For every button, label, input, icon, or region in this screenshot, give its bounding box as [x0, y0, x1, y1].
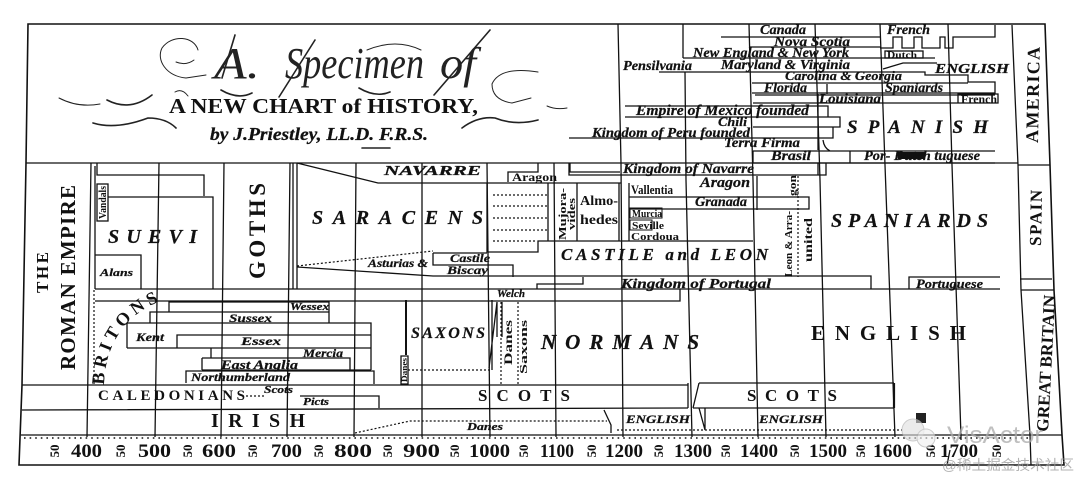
century labels: 1500 [809, 441, 847, 462]
label: SCOTS second: SCOTS [747, 386, 837, 405]
label: ENGLISH large: ENGLISH [811, 321, 966, 345]
Spain section [95, 162, 1000, 301]
label: Canada: Canada [760, 23, 806, 38]
half-century labels: 50 [989, 444, 1004, 458]
label: Alans: Alans [99, 267, 133, 279]
title script [210, 39, 482, 88]
title main line: A NEW CHART of HISTORY, [169, 94, 478, 118]
left side label: The Roman Empire [33, 185, 80, 370]
century grid lines [87, 24, 961, 437]
title script: Specimen [285, 39, 424, 88]
label: hedes: hedes [580, 213, 619, 228]
label: GREAT BRITAIN: GREAT BRITAIN [1033, 294, 1059, 432]
half-century labels: 50 [180, 444, 195, 458]
label: Murcia: Murcia [632, 208, 662, 220]
watermark [902, 419, 1074, 473]
label: Northumberland: Northumberland [190, 370, 291, 384]
half-century labels: 50 [113, 444, 128, 458]
century labels: 1000 [469, 441, 510, 462]
half-century labels: 50 [447, 444, 462, 458]
century labels: 800 [334, 441, 372, 462]
label: SARACENS: SARACENS [312, 207, 483, 229]
label: Scots small: Scots [264, 384, 293, 396]
label: Florida: Florida [763, 81, 807, 96]
half-century labels: 50 [311, 444, 326, 458]
label: Aragon small: Aragon [512, 170, 557, 184]
time scale [24, 437, 1030, 465]
Scots boxes and notch [688, 383, 705, 430]
label: Almo-: Almo- [580, 194, 618, 209]
label: Empire of Mexico founded: Empire of Mexico founded [635, 103, 810, 119]
label: Mercia: Mercia [302, 346, 343, 360]
label: Granada: Granada [695, 195, 747, 210]
label: BRITONS: BRITONS [92, 292, 156, 384]
label: Louisiana: Louisiana [818, 92, 881, 107]
label: Danes box: Danes [400, 358, 409, 382]
label: East Anglia: East Anglia [220, 357, 299, 372]
label: Nova Scotia: Nova Scotia [773, 35, 850, 50]
half-century labels: 50 [787, 444, 802, 458]
half-century labels: 50 [47, 444, 62, 458]
Saxons and Danes marks [405, 300, 407, 355]
label: Navarre: NAVARRE [382, 164, 481, 179]
label: Portuguese: Portuguese [916, 276, 983, 291]
century labels: 700 [271, 441, 302, 462]
Spain boundaries [297, 163, 826, 183]
label: GOTHS: GOTHS [245, 183, 270, 279]
Dutch lower box [898, 152, 925, 159]
label: Kingdom of Peru founded: Kingdom of Peru founded [591, 126, 751, 141]
label: Gum: gon [787, 175, 799, 196]
century labels: 1200 [605, 441, 643, 462]
label: SPAIN: SPAIN [1026, 189, 1046, 246]
Great Britain section [92, 288, 966, 434]
label: Mujora vides: Mujora- [557, 188, 569, 240]
label: Sussex: Sussex [229, 311, 272, 325]
label: Pensilvania: Pensilvania [623, 59, 692, 74]
label: Kent: Kent [135, 330, 165, 344]
label: THE: THE [33, 252, 52, 293]
label: Spaniards small: Spaniards [885, 81, 944, 96]
label: Picts: Picts [303, 396, 329, 408]
label: Cordoua: Cordoua [631, 231, 680, 243]
century labels: 1400 [740, 441, 778, 462]
label: vides: vides [566, 197, 578, 230]
century labels: 900 [403, 441, 440, 462]
label: Maryland and Virginia: Maryland & Virginia [720, 58, 850, 73]
label: Carolina and Georgia: Carolina & Georgia [785, 68, 903, 83]
label: French upper: French [886, 23, 930, 38]
century labels: 1700 [940, 441, 978, 462]
label: Danes vertical: Danes [501, 320, 515, 365]
kingdoms of the heptarchy [127, 302, 374, 384]
label: ENGLISH first small: ENGLISH [625, 412, 691, 426]
century labels: 1300 [674, 441, 712, 462]
half-century labels [47, 444, 1004, 458]
label: Essex: Essex [240, 334, 281, 348]
half-century labels: 50 [516, 444, 531, 458]
label: Leon and Arragon: Leon & Arra- [783, 211, 795, 277]
century labels: 1100 [540, 441, 574, 462]
label: NORMANS: NORMANS [540, 330, 699, 354]
label: Portuguese with Dutch: Por- Dutch tuguese [864, 149, 980, 164]
title block [59, 30, 567, 148]
century labels: 500 [138, 441, 171, 462]
Saracens wedge [297, 251, 433, 266]
label: Wessex: Wessex [290, 301, 330, 313]
label: CALEDONIANS: CALEDONIANS [98, 388, 245, 404]
label: SCOTS first: SCOTS [478, 386, 570, 405]
label: Chili: Chili [718, 114, 747, 129]
America colony boundaries [659, 37, 998, 103]
half-century labels: 50 [718, 444, 733, 458]
label: Brasil: Brasil [770, 149, 811, 164]
half-century labels: 50 [584, 444, 599, 458]
label: Vandals: Vandals [98, 186, 109, 219]
Vandals and Suevi boxes [95, 163, 213, 289]
half-century labels: 50 [380, 444, 395, 458]
label: CASTILE and LEON: CASTILE and LEON [561, 245, 769, 264]
label: French lower: French [961, 92, 997, 106]
label: Kingdom of Navarre: Kingdom of Navarre [622, 162, 754, 177]
half-century labels: 50 [245, 444, 260, 458]
watermark name: VisActor [947, 422, 1043, 449]
Dutch upper box: Dutch [887, 50, 917, 60]
label: Terra Firma: Terra Firma [724, 136, 800, 151]
label: Valentia: Vallentia [631, 182, 673, 197]
half-century labels: 50 [923, 444, 938, 458]
icon: chat bubbles [902, 419, 935, 447]
century labels: 1600 [873, 441, 912, 462]
label: SUEVI: SUEVI [108, 226, 198, 248]
Dutch upper box [885, 50, 923, 60]
label: SPANIARDS: SPANIARDS [831, 210, 988, 232]
label: Seville: Seville [632, 220, 664, 232]
century labels [71, 441, 978, 462]
label: Castile: Castile [450, 251, 491, 265]
label: Aragon large: Aragon [699, 175, 750, 191]
label: New England and New York: New England & New York [692, 46, 849, 61]
watermark site: @稀土掘金技术社区 [942, 457, 1074, 473]
label: AMERICA: AMERICA [1022, 47, 1044, 143]
label: Biscay: Biscay [446, 263, 489, 277]
century labels: 400 [71, 441, 102, 462]
label: united: united [801, 218, 815, 262]
title flourishes [59, 30, 567, 148]
America section [569, 23, 1010, 164]
label: SAXONS: SAXONS [411, 325, 485, 342]
century labels: 600 [202, 441, 236, 462]
title author: by J.Priestley, LL.D. F.R.S. [210, 124, 428, 144]
scale dots [24, 437, 1030, 439]
label: SPANISH: SPANISH [847, 117, 989, 138]
label: Danes bottom: Danes [466, 421, 503, 433]
label: ENGLISH second small: ENGLISH [758, 412, 824, 426]
title script: of [440, 39, 482, 88]
label: IRISH: IRISH [211, 410, 305, 432]
half-century labels: 50 [853, 444, 868, 458]
label: Welch: Welch [497, 288, 525, 300]
right column region labels [1022, 47, 1059, 432]
half-century labels: 50 [651, 444, 666, 458]
label: Kingdom of Portugal: Kingdom of Portugal [620, 277, 771, 292]
label: ENGLISH upper: ENGLISH [934, 62, 1010, 77]
label: ROMAN EMPIRE: ROMAN EMPIRE [56, 185, 80, 370]
title script: A. [210, 39, 260, 88]
label: Asturias: Asturias & [367, 256, 429, 270]
label: Saxons vertical: Saxons [518, 319, 530, 374]
